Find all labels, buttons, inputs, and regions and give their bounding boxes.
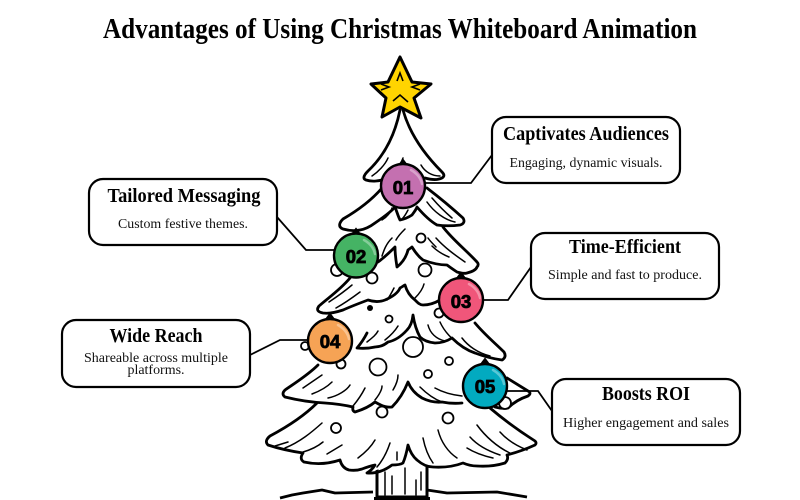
ground [280, 490, 527, 498]
bauble 03 [439, 273, 483, 322]
callout: Captivates Audiences [492, 117, 680, 183]
callout: Wide Reach [62, 320, 250, 387]
bauble 01 [381, 160, 425, 208]
callout: Boosts ROI: Higher engagement and sales [563, 415, 729, 430]
tier 5 [357, 300, 505, 360]
callout: Captivates Audiences: Engaging, dynamic visuals. [510, 155, 662, 170]
callout: Time-Efficient [531, 233, 719, 299]
icon: star [371, 57, 431, 118]
callout: Boosts ROI: Boosts ROI [602, 383, 690, 405]
tier 2 [340, 188, 464, 231]
callout: Wide Reach: Shareable across multiple [84, 350, 228, 365]
tier 7 [266, 395, 536, 473]
bauble 05: 05 [475, 376, 495, 397]
callout: Tailored Messaging [89, 179, 277, 245]
callout: Captivates Audiences: Captivates Audiences [503, 123, 669, 145]
callout: Time-Efficient: Simple and fast to produce. [548, 267, 702, 282]
bauble 05 [463, 359, 507, 408]
callout: Time-Efficient: Time-Efficient [569, 236, 681, 258]
tier 1 [364, 110, 444, 181]
tier 6 [283, 340, 530, 412]
bauble 02: 02 [346, 246, 366, 267]
title: Advantages of Using Christmas Whiteboard Animation [103, 13, 697, 45]
bauble 04 [308, 314, 352, 363]
bauble 04: 04 [320, 331, 341, 352]
bauble 01: 01 [393, 177, 413, 198]
tier 3 [378, 215, 478, 273]
callout: Wide Reach: platforms. [128, 362, 184, 377]
bauble 02 [334, 229, 378, 278]
illustration: Christmas tree [266, 57, 536, 498]
trunk [377, 466, 427, 497]
callout: Tailored Messaging: Tailored Messaging [108, 185, 260, 207]
callout: Boosts ROI [552, 379, 740, 445]
connector lines [250, 155, 552, 411]
callout: Tailored Messaging: Custom festive themes. [118, 216, 248, 231]
bauble 03: 03 [451, 291, 471, 312]
callout: Wide Reach: Wide Reach [110, 325, 202, 347]
ornaments: outlined baubles [301, 234, 511, 433]
tier 4 [318, 250, 445, 313]
